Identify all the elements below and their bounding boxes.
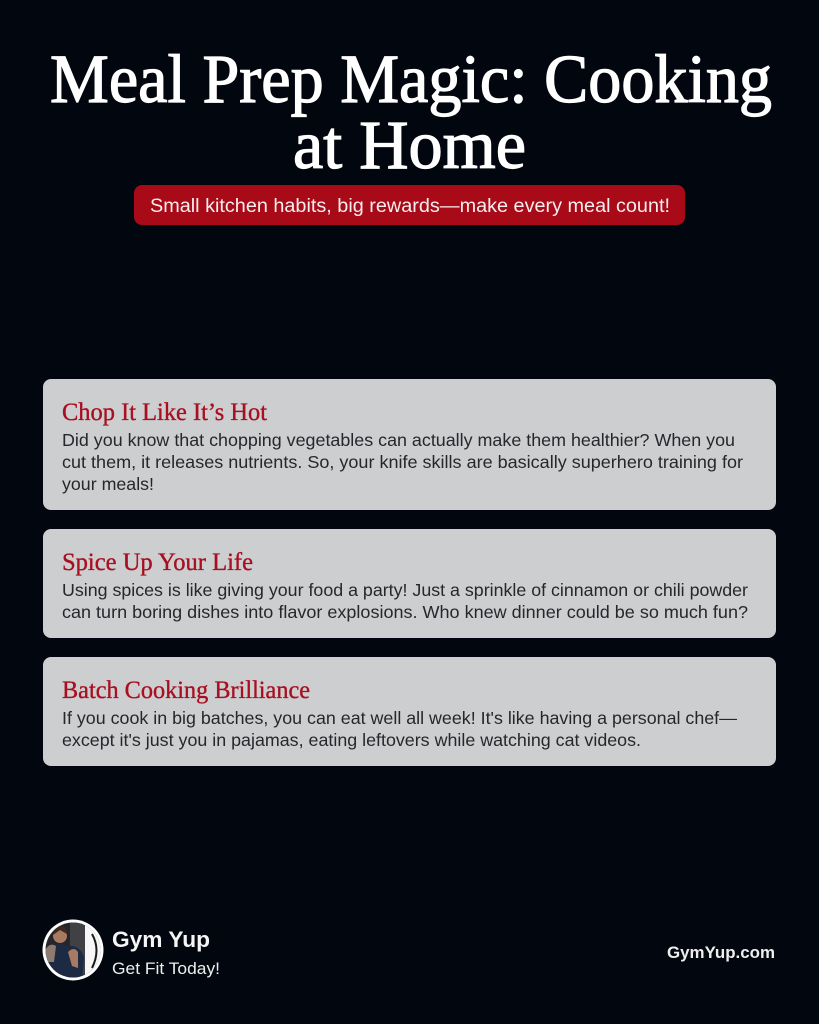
title xyxy=(50,41,772,183)
heading: batch: Batch Cooking Brilliance xyxy=(62,677,310,704)
website: GymYup.com xyxy=(667,943,775,962)
panel: chop it like it's hot xyxy=(43,379,776,510)
heading: chop: Chop It Like It’s Hot xyxy=(62,399,267,426)
subtitle banner: Small kitchen habits, big rewards—make every meal count! xyxy=(150,196,670,217)
panel: spice up your life xyxy=(43,529,776,638)
text block: spice: can turn boring dishes into flavor explosions. Who knew dinner could be so much fun? xyxy=(62,602,748,622)
text block: spice: Using spices is like giving your food a party! Just a sprinkle of cinnamon or chili powder xyxy=(62,580,748,600)
subtitle banner xyxy=(134,185,685,225)
title: Meal Prep Magic: Cooking xyxy=(50,41,772,117)
panel: batch cooking brilliance xyxy=(43,657,776,766)
brand name: Gym Yup xyxy=(112,927,210,952)
text block: chop xyxy=(62,430,743,494)
text block: batch xyxy=(62,708,738,750)
title: at Home xyxy=(293,107,526,183)
icon: avatar xyxy=(42,920,105,980)
tagline: Get Fit Today! xyxy=(112,959,220,978)
text block: batch: If you cook in big batches, you can eat well all week! It's like having a personal chef— xyxy=(62,708,738,728)
heading: spice: Spice Up Your Life xyxy=(62,549,253,576)
text block: batch: except it's just you in pajamas, eating leftovers while watching cat videos. xyxy=(62,730,641,750)
text block: chop: cut them, it releases nutrients. So, your knife skills are basically superhero training for xyxy=(62,452,743,472)
text block: spice xyxy=(62,580,748,622)
text block: chop: your meals! xyxy=(62,474,154,494)
text block: chop: Did you know that chopping vegetables can actually make them healthier? When you xyxy=(62,430,735,450)
